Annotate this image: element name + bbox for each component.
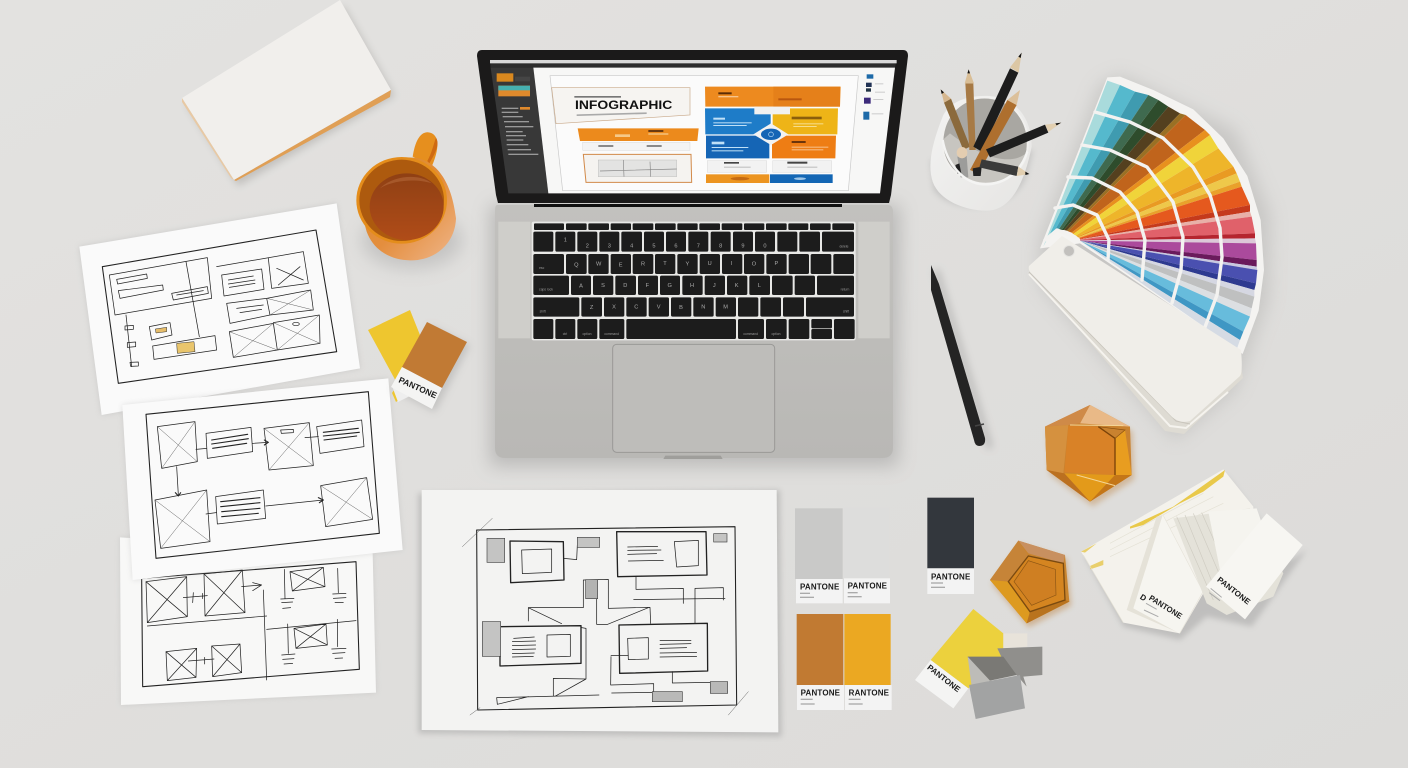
laptop base (495, 205, 893, 458)
ochre swatch (797, 614, 844, 710)
middle Pantone card: D (1138, 592, 1148, 603)
keyboard and trackpad: U (708, 261, 712, 267)
keyboard and trackpad: N (701, 304, 705, 310)
laptop screen bezel (477, 50, 908, 203)
artboard (533, 68, 895, 193)
fan card stack (1029, 240, 1243, 434)
keyboard and trackpad: shift (843, 309, 849, 313)
amber swatch: RANTONE (849, 689, 890, 698)
mug shadow (362, 212, 462, 268)
fan cover card (1029, 236, 1242, 422)
top Pantone card (1206, 513, 1303, 619)
keyboard and trackpad: C (634, 304, 638, 310)
on-screen colour blocks (705, 87, 841, 107)
on-screen title card (552, 88, 690, 124)
chip label (391, 367, 442, 409)
keyboard and trackpad: B (679, 305, 683, 311)
tan pencil middle (965, 83, 976, 150)
trackpad (613, 344, 775, 452)
keyboard and trackpad: I (731, 261, 733, 267)
middle Pantone card (1127, 515, 1203, 633)
sketch sheet 3 (120, 537, 376, 705)
keyboard and trackpad: option (582, 332, 592, 336)
stylus pen (931, 265, 990, 448)
laptop screen content (490, 60, 897, 193)
middle Pantone card: PANTONE (1147, 593, 1184, 621)
cup body (930, 96, 1032, 211)
keyboard and trackpad: shift (540, 309, 546, 313)
fan chip dividers (1045, 112, 1222, 327)
cup front rim (943, 140, 1027, 184)
keyboard and trackpad: 1 (564, 238, 567, 244)
light grey swatch: PANTONE (848, 582, 888, 591)
keyboard and trackpad: A (579, 284, 583, 290)
sketch sheet 1 (79, 203, 360, 415)
short pencil (957, 156, 968, 177)
editor sidebar (491, 68, 548, 193)
colour fan deck (1029, 75, 1270, 440)
white notebook (182, 0, 395, 186)
mug body (357, 157, 456, 260)
keyboard and trackpad: T (663, 261, 667, 267)
keyboard and trackpad: 8 (719, 244, 722, 250)
orange pencil (970, 100, 1017, 173)
keyboard and trackpad: 2 (586, 244, 589, 250)
mug handle (413, 132, 437, 167)
grey pencil (979, 159, 1018, 176)
keyboard and trackpad: 5 (652, 244, 656, 250)
keyboard and trackpad: 3 (608, 244, 611, 250)
keyboard and trackpad: delete (839, 245, 849, 249)
base card with yellow stripe (1081, 469, 1253, 633)
amber gem bottom (990, 541, 1071, 627)
keyboard and trackpad: R (641, 262, 645, 268)
keyboard and trackpad: G (667, 283, 672, 289)
grey swatch (795, 508, 843, 603)
keyboard and trackpad: M (723, 304, 728, 310)
sketch sheet group (79, 203, 403, 705)
keyboard and trackpad: O (752, 262, 757, 268)
screen tool icons (867, 74, 873, 79)
stacked cards (1173, 508, 1283, 615)
orange mug (356, 132, 456, 260)
ochre swatch: PANTONE (801, 689, 841, 698)
charcoal swatch (927, 498, 974, 594)
keyboard and trackpad: H (690, 283, 694, 289)
tea (370, 173, 444, 240)
sketch sheet 2 (122, 378, 403, 580)
Pantone chips beside mug (368, 310, 470, 412)
brown chip (402, 322, 467, 388)
keyboard and trackpad: E (619, 262, 623, 268)
on-screen left column (578, 128, 699, 141)
cup opening (942, 98, 1028, 183)
keyboard and trackpad: K (735, 283, 739, 289)
keyboard and trackpad: ctrl (563, 332, 567, 336)
keyboard and trackpad: 9 (741, 244, 745, 250)
pencil cup (930, 53, 1061, 211)
laptop (477, 50, 908, 466)
keyboard and trackpad: P (774, 261, 778, 267)
keyboard and trackpad: 7 (697, 244, 700, 250)
keyboard and trackpad: F (646, 283, 650, 289)
keyboard and trackpad: 4 (630, 244, 633, 250)
keyboard and trackpad: S (601, 283, 605, 289)
tan pencil left (944, 99, 970, 150)
Pantone card set (795, 498, 1042, 719)
keyboard and trackpad: caps lock (539, 288, 553, 292)
keyboard and trackpad: Q (574, 262, 579, 268)
keyboard and trackpad: V (657, 304, 661, 310)
black pencil right (986, 125, 1048, 157)
Pantone chips beside mug: PANTONE (397, 375, 439, 401)
light grey swatch (843, 507, 890, 603)
amber swatch (844, 614, 892, 710)
keyboard and trackpad: 0 (763, 244, 767, 250)
keyboard and trackpad: W (596, 262, 602, 268)
keyboard and trackpad: Z (590, 305, 594, 311)
yellow chip (368, 310, 424, 402)
keyboard and trackpad: command (604, 332, 619, 336)
top Pantone card: PANTONE (1215, 575, 1253, 607)
yellow rotated swatch (915, 609, 1003, 708)
fan chip paper and colour bands (1040, 77, 1264, 354)
keyboard and trackpad: esc (539, 266, 545, 270)
main sketch sheet (418, 490, 782, 737)
loose white swatch fan (1081, 469, 1307, 640)
laptop screen content: INFOGRAPHIC (575, 99, 673, 112)
keyboard and trackpad (498, 222, 890, 459)
keyboard and trackpad: command (743, 332, 758, 336)
fan rivet (1064, 246, 1074, 256)
black pencil tall (973, 68, 1018, 152)
amber gem top (1045, 405, 1134, 506)
keyboard and trackpad: D (623, 283, 627, 289)
charcoal swatch: PANTONE (931, 572, 971, 581)
keyboard and trackpad: option (771, 332, 781, 336)
keyboard and trackpad: L (758, 283, 761, 289)
keyboard and trackpad: X (612, 305, 616, 311)
keyboard and trackpad: return (841, 288, 849, 292)
yellow rotated swatch: PANTONE (925, 663, 963, 695)
keyboard and trackpad: Y (685, 262, 689, 268)
grey folded swatches (968, 633, 1042, 719)
keyboard and trackpad: J (713, 283, 716, 289)
keyboard and trackpad: 6 (674, 244, 678, 250)
grey swatch: PANTONE (800, 582, 840, 591)
mug rim (356, 157, 447, 244)
